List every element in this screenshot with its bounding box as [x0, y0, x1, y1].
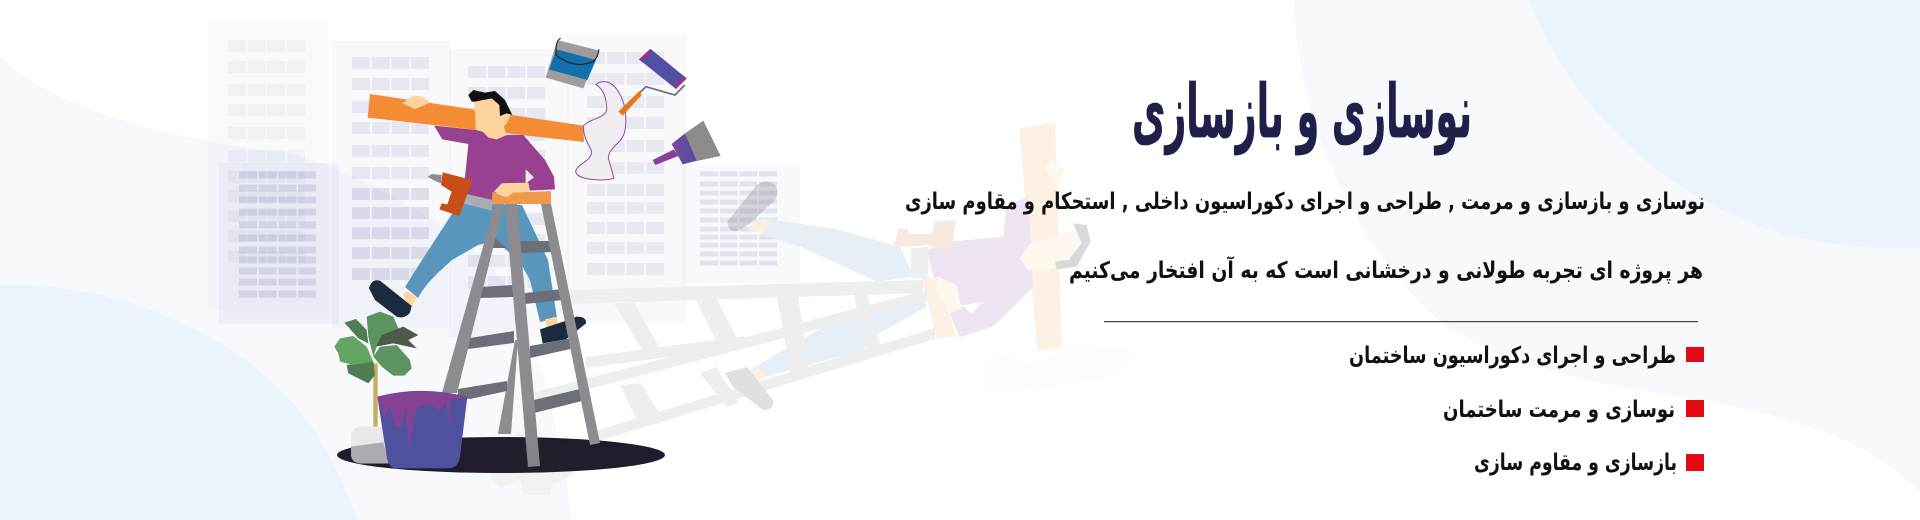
ladder — [442, 204, 600, 467]
upper body of worker — [368, 90, 584, 216]
shirt — [434, 126, 555, 200]
icon: paint roller — [618, 49, 687, 116]
reflected shirt — [927, 196, 1033, 337]
reflected upper shoe — [727, 182, 777, 231]
shoes and ankles — [369, 280, 586, 343]
plant — [334, 312, 418, 463]
intro text line 1: نوسازی و بازسازی و مرمت , طراحی و اجرای دکوراسیون داخلی , استحکام و مقاوم سازی — [905, 189, 1705, 215]
list item 3: بازسازی و مقاوم سازی — [1474, 450, 1677, 476]
plant pot — [351, 427, 388, 463]
paint bucket — [377, 391, 467, 468]
reflected belt — [911, 247, 928, 278]
head — [468, 90, 512, 139]
faded plant reflection — [490, 432, 577, 495]
reflected hammer head — [1055, 223, 1091, 269]
trousers — [405, 203, 557, 322]
leaves — [334, 312, 418, 383]
reflected lower shoe — [725, 367, 773, 410]
hammer outline — [576, 82, 626, 180]
ground shadow — [337, 437, 665, 473]
faded reflection of worker — [727, 123, 1133, 393]
divider — [1104, 321, 1698, 322]
plant reflection over shadow — [500, 437, 572, 472]
list item 1: طراحی و اجرای دکوراسیون ساختمان — [1349, 343, 1676, 369]
reflected hands — [935, 158, 1083, 313]
belt — [459, 193, 493, 211]
plank — [368, 94, 584, 142]
intro text line 2: هر پروژه ای تجربه طولانی و درخشانی است که به آن افتخار می‌کنیم — [1069, 255, 1703, 284]
reflected plant — [980, 348, 1133, 393]
drill — [428, 172, 472, 216]
text: نوسازی و بازسازی — [1132, 69, 1472, 156]
reflected plank — [1019, 123, 1062, 352]
ladder top and right hand — [492, 183, 551, 204]
tools — [546, 38, 721, 180]
list item 2: نوسازی و مرمت ساختمان — [1443, 397, 1675, 423]
buildings backdrop — [208, 23, 800, 337]
reflected drill — [893, 220, 956, 252]
reflected ladder top — [922, 277, 957, 338]
reflected trousers — [750, 218, 927, 377]
left hand — [402, 96, 430, 109]
icon: paint can — [546, 38, 599, 88]
icon: paint brush — [653, 121, 721, 165]
reflected foot — [748, 220, 772, 380]
faded reflection of ladder — [535, 280, 935, 443]
